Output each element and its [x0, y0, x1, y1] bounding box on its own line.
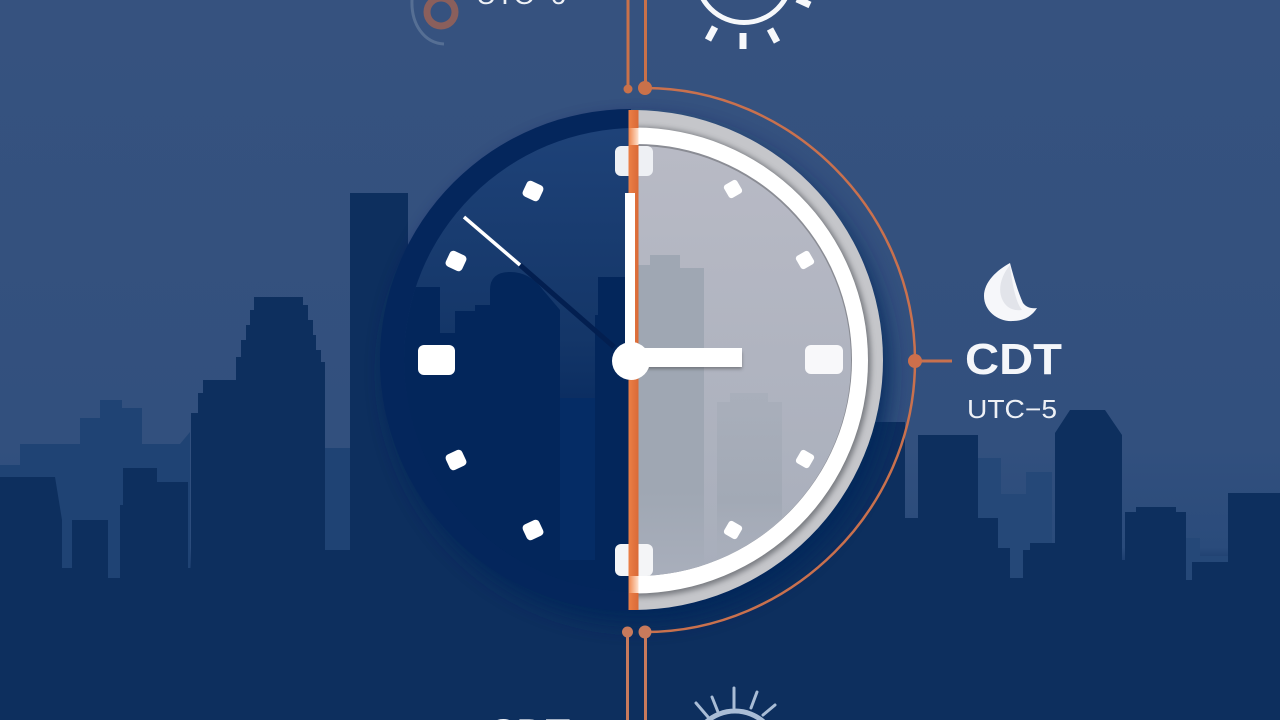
bottom connector lines	[622, 626, 652, 720]
centre hub	[612, 342, 650, 380]
clock shadow	[388, 122, 888, 622]
orange divider	[628, 110, 638, 610]
connector to CDT label	[915, 360, 952, 362]
tick: 3 o'clock	[805, 345, 843, 374]
night half building silhouettes	[404, 272, 628, 560]
label: UTC−5: UTC−5	[967, 394, 1057, 424]
skyline: front layer	[0, 193, 1280, 720]
clock: day half	[638, 110, 883, 610]
hour hand	[631, 348, 742, 369]
clock: night half	[381, 109, 631, 560]
tick: 12 o'clock	[615, 146, 653, 176]
icon: moon	[984, 263, 1037, 321]
orange arc connector	[645, 88, 952, 632]
clock	[380, 109, 883, 611]
minor hour ticks	[444, 179, 815, 542]
connector dot: CDT	[908, 354, 922, 368]
tick: 6 o'clock	[615, 544, 653, 576]
top connector lines	[624, 0, 652, 95]
skyline: rear layer	[0, 400, 1230, 600]
icon: clipped ring at top left	[412, 0, 455, 44]
tick: 9 o'clock	[418, 345, 455, 375]
minute hand	[625, 193, 635, 361]
icon: sun at bottom	[692, 688, 778, 720]
icon: sun at top	[696, 0, 810, 49]
second hand	[464, 217, 614, 347]
day half building silhouettes	[638, 255, 782, 518]
label: CDT: CDT	[965, 335, 1062, 384]
